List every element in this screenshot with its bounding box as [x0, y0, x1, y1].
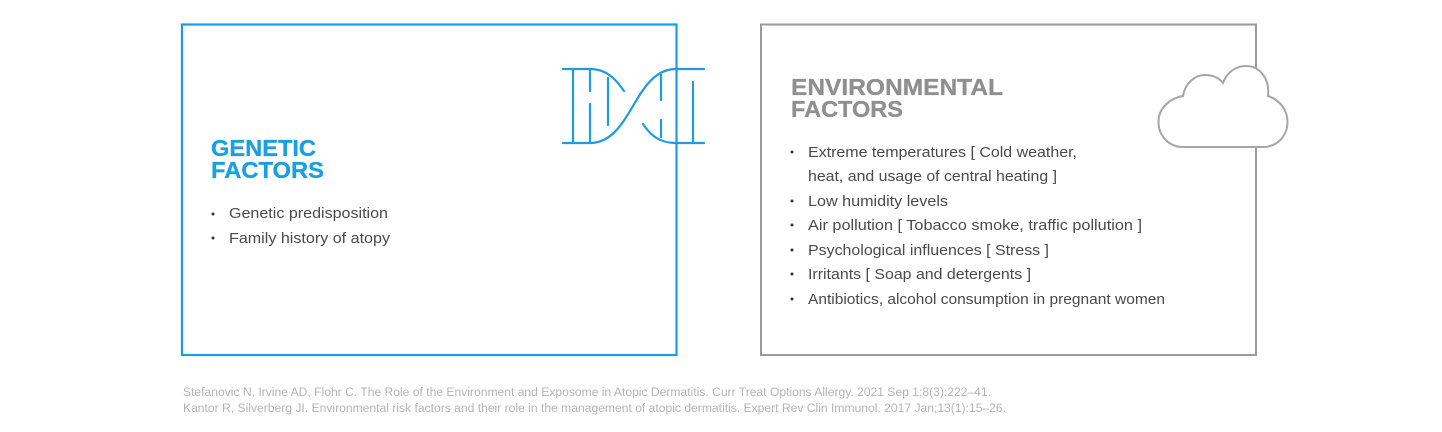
heading: environmental factors	[791, 74, 1003, 122]
heading: environmental factors: FACTORS	[791, 96, 903, 122]
heading: genetic factors: GENETIC	[211, 135, 316, 161]
list: environmental factors: Air pollution [ Tobacco smoke, traffic pollution ]	[808, 217, 1142, 234]
references: Kantor R, Silverberg JI. Environmental risk factors and their role in the management of atopic dermatitis. Expert Rev Clin Immunol. 2017 Jan;13(1):15–26.	[183, 403, 1006, 415]
list: environmental factors: Psychological influences [ Stress ]	[808, 242, 1049, 259]
icon: DNA helix	[563, 69, 704, 143]
icon: cloud	[1158, 66, 1288, 147]
heading: environmental factors: ENVIRONMENTAL	[791, 74, 1003, 100]
panel: genetic factors	[182, 24, 676, 355]
list: environmental factors	[790, 144, 1165, 308]
list: environmental factors: Extreme temperatures [ Cold weather,	[808, 144, 1077, 161]
list: environmental factors: Irritants [ Soap and detergents ]	[808, 266, 1031, 283]
list: genetic factors: Genetic predisposition	[229, 205, 388, 222]
list: environmental factors: Low humidity levels	[808, 193, 948, 210]
list: environmental factors: heat, and usage of central heating ]	[808, 168, 1057, 185]
heading: genetic factors	[211, 135, 324, 183]
list: environmental factors: Antibiotics, alcohol consumption in pregnant women	[808, 291, 1165, 308]
heading: genetic factors: FACTORS	[211, 157, 324, 183]
panel: environmental factors	[761, 24, 1256, 355]
references	[183, 387, 1006, 415]
list: genetic factors: Family history of atopy	[229, 230, 391, 247]
references: Stefanovic N, Irvine AD, Flohr C. The Role of the Environment and Exposome in Atopic Dermatitis. Curr Treat Options Allergy. 2021 Sep 1;8(3):222–41.	[183, 387, 991, 399]
list: genetic factors	[212, 205, 391, 247]
